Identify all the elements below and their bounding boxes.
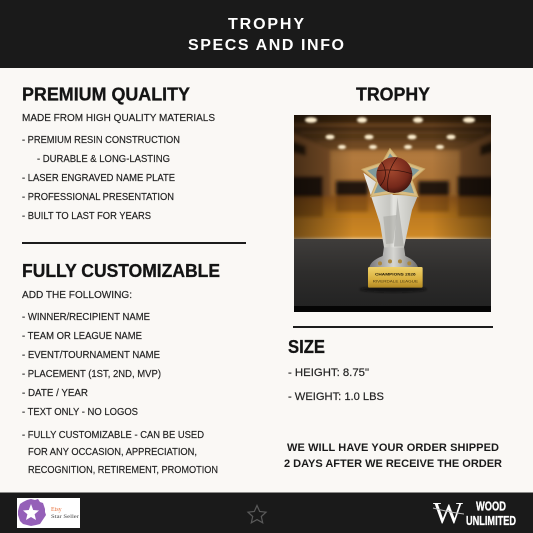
icon: etsy star seller badge: Star Seller bbox=[51, 514, 79, 520]
text block: customization list: ADD THE FOLLOWING: bbox=[22, 289, 132, 301]
text block: quality list: - BUILT TO LAST FOR YEARS bbox=[22, 210, 151, 222]
text block: quality list: - PROFESSIONAL PRESENTATION bbox=[22, 191, 174, 203]
icon: etsy star seller badge bbox=[17, 498, 80, 528]
side walls bbox=[290, 132, 330, 196]
text block: customization list bbox=[22, 289, 218, 476]
text block: quality list: - PREMIUM RESIN CONSTRUCTION bbox=[22, 134, 180, 146]
name plate: RIVERDALE LEAGUE bbox=[373, 279, 418, 284]
text block: customization list: - EVENT/TOURNAMENT NAME bbox=[22, 349, 160, 361]
trophy photo bbox=[290, 111, 495, 312]
heading: fully customizable: FULLY CUSTOMIZABLE bbox=[22, 261, 220, 281]
logo: wood unlimited: WOOD bbox=[476, 500, 506, 514]
name plate: CHAMPIONS 2026 bbox=[375, 271, 417, 276]
logo: wood unlimited: W bbox=[433, 495, 464, 530]
text block: quality list: - LASER ENGRAVED NAME PLATE bbox=[22, 172, 175, 184]
heading: premium quality: PREMIUM QUALITY bbox=[22, 84, 190, 104]
trophy stem bbox=[363, 173, 418, 247]
text block: quality list bbox=[22, 112, 215, 222]
text block: dimensions bbox=[288, 367, 384, 403]
heading: trophy: TROPHY bbox=[356, 84, 430, 104]
trophy bbox=[360, 149, 427, 292]
logo: wood unlimited bbox=[433, 495, 516, 530]
basketball bbox=[376, 157, 412, 193]
dark wall pads bbox=[290, 176, 323, 197]
panel: fully customizable bbox=[22, 261, 220, 476]
text block: customization list: - TEAM OR LEAGUE NAME bbox=[22, 330, 142, 342]
shipping callout bbox=[284, 442, 502, 470]
text block: customization list: - FULLY CUSTOMIZABLE - CAN BE USED bbox=[22, 429, 204, 441]
text block: customization list: - TEXT ONLY - NO LOGOS bbox=[22, 406, 138, 418]
text block: quality list: - DURABLE & LONG-LASTING bbox=[37, 153, 170, 165]
panel: premium quality bbox=[22, 84, 215, 222]
text block: dimensions: - HEIGHT: 8.75" bbox=[288, 367, 369, 379]
text block: customization list: RECOGNITION, RETIREMENT, PROMOTION bbox=[28, 464, 218, 476]
header band: SPECS AND INFO bbox=[188, 37, 344, 54]
icon: star outline bbox=[248, 506, 266, 523]
shipping callout: WE WILL HAVE YOUR ORDER SHIPPED bbox=[287, 442, 499, 454]
text block: customization list: - PLACEMENT (1ST, 2ND, MVP) bbox=[22, 368, 161, 380]
panel: size bbox=[288, 337, 384, 403]
text block: customization list: FOR ANY OCCASION, APPRECIATION, bbox=[28, 446, 197, 458]
ceiling lights bbox=[305, 117, 475, 149]
heading: size: SIZE bbox=[288, 337, 325, 357]
icon: etsy star seller badge: Etsy bbox=[51, 507, 62, 513]
shipping callout: 2 DAYS AFTER WE RECEIVE THE ORDER bbox=[284, 458, 502, 470]
header band bbox=[0, 0, 533, 68]
text block: customization list: - DATE / YEAR bbox=[22, 387, 88, 399]
court floor bbox=[290, 196, 495, 239]
ceiling bbox=[290, 111, 495, 150]
name plate bbox=[368, 267, 423, 288]
text block: quality list: MADE FROM HIGH QUALITY MATERIALS bbox=[22, 112, 215, 124]
gym background bbox=[290, 111, 495, 239]
table surface bbox=[294, 239, 491, 306]
text block: customization list: - WINNER/RECIPIENT NAME bbox=[22, 311, 150, 323]
trophy base bbox=[369, 247, 418, 267]
header band: TROPHY bbox=[228, 16, 304, 33]
logo: wood unlimited: UNLIMITED bbox=[466, 514, 516, 528]
star bbox=[362, 149, 425, 197]
text block: dimensions: - WEIGHT: 1.0 LBS bbox=[288, 391, 384, 403]
footer band bbox=[0, 492, 533, 533]
